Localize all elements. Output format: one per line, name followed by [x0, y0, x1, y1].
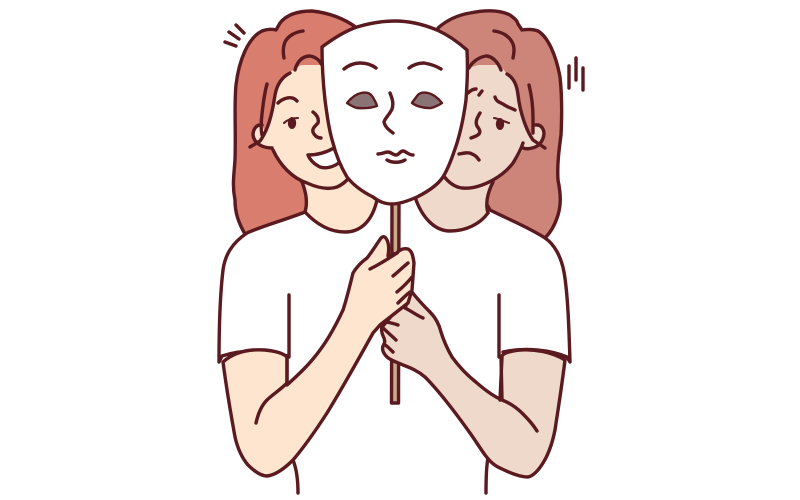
- left sleeve seam: [287, 295, 291, 357]
- smiling mouth: [308, 148, 340, 168]
- mask right eye hole: [412, 93, 442, 108]
- right neck side line: [487, 182, 493, 213]
- left neck side line: [302, 182, 306, 212]
- left arm bicep crease: [256, 383, 287, 423]
- right face: [443, 65, 531, 188]
- left shirt: [219, 212, 305, 362]
- right shirt: [503, 238, 570, 362]
- right figure: sad woman: [415, 11, 562, 238]
- left ear: [253, 125, 272, 148]
- right arm bicep crease: [502, 400, 537, 431]
- sad mouth: [459, 153, 479, 160]
- right neck and chest: [415, 170, 493, 231]
- left arm holding stick: [223, 237, 414, 476]
- right hand finger lines: [381, 295, 423, 352]
- right sleeve seam: [497, 295, 501, 357]
- right lower torso line: [486, 458, 488, 493]
- left neck and chest: [302, 170, 377, 232]
- right small brow: [468, 89, 482, 95]
- left collar: [305, 200, 377, 232]
- left hair strands: [250, 31, 322, 147]
- left hair: [233, 11, 357, 234]
- mask stick: [392, 200, 399, 403]
- mask lips: [378, 151, 413, 162]
- mask left eye hole: [347, 93, 377, 108]
- right nose: [471, 113, 480, 138]
- left eye: [284, 117, 298, 129]
- mask nose: [384, 93, 393, 133]
- right hair strands: [469, 31, 545, 148]
- mask left brow: [344, 63, 376, 69]
- left figure: happy woman: [233, 11, 377, 234]
- left motion marks: [225, 25, 244, 46]
- right worried brow: [495, 97, 515, 110]
- left nose: [313, 112, 321, 138]
- mask outline: [322, 21, 467, 204]
- left face: [262, 65, 345, 189]
- right arm holding stick: [382, 292, 565, 477]
- mask right brow: [409, 63, 441, 69]
- white mask: [322, 21, 467, 204]
- right collar: [415, 197, 488, 231]
- right forearm inner line: [500, 357, 502, 400]
- right eye: [494, 118, 509, 130]
- right motion marks: [569, 58, 583, 90]
- left hand thumb and finger lines: [370, 253, 412, 303]
- right jaw: [443, 143, 523, 188]
- left eyebrow: [278, 98, 297, 103]
- left lower torso line: [293, 460, 298, 493]
- left jaw: [273, 150, 348, 188]
- shirt body fill: [287, 199, 500, 420]
- left forearm inner line: [285, 357, 289, 383]
- right hair: [438, 11, 562, 238]
- right ear: [523, 125, 544, 149]
